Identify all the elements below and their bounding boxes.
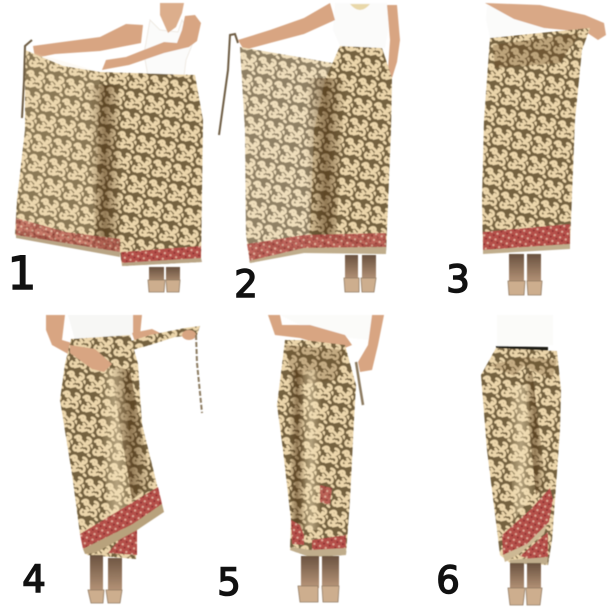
gathered knot folds <box>490 357 557 380</box>
sarong <box>482 28 590 250</box>
shoes <box>148 280 180 292</box>
hem <box>483 244 570 254</box>
red border <box>247 233 386 261</box>
tank top <box>486 5 548 38</box>
step 3: second side pulled across <box>482 3 606 295</box>
hanging tie <box>196 335 202 413</box>
front red border <box>121 246 201 264</box>
model arms <box>268 315 384 372</box>
fold shadow <box>288 370 306 530</box>
shoes <box>508 281 542 295</box>
shoes <box>344 278 376 292</box>
red border panel <box>16 218 120 253</box>
model arms <box>46 315 160 372</box>
legs <box>301 556 339 588</box>
hand holding tie <box>182 330 196 340</box>
tank top <box>333 3 390 48</box>
number 3: 3 <box>446 258 470 301</box>
waist folds <box>493 33 580 68</box>
model arm and hand <box>485 3 606 40</box>
diagonal hem <box>503 524 547 562</box>
red border <box>483 224 570 250</box>
model torso and tank top <box>144 20 194 76</box>
draped sarong <box>60 335 163 559</box>
fold shading <box>306 78 346 238</box>
white top <box>497 315 553 346</box>
step 6: finished sarong with knot <box>481 315 561 605</box>
necklace <box>350 4 370 10</box>
hand on waist <box>70 345 112 372</box>
number 1: 1 <box>8 247 36 300</box>
legs <box>90 555 122 593</box>
waist tie <box>22 40 32 118</box>
shoes <box>298 586 339 602</box>
step 4: front gathered and tie pulled around the waist <box>46 315 202 603</box>
centre fold highlight <box>506 385 536 520</box>
fold shading <box>88 85 122 250</box>
shoes <box>88 590 122 603</box>
red border <box>312 535 346 552</box>
red patch <box>320 485 332 505</box>
fold shadow <box>110 365 152 500</box>
diagonal hem <box>83 504 164 554</box>
sarong <box>277 340 356 557</box>
legs <box>345 255 376 281</box>
sarong cloth <box>15 50 203 266</box>
red corner <box>291 520 304 545</box>
centre fold <box>300 370 322 530</box>
neck and chin <box>160 3 184 33</box>
pale sheen on left panel <box>16 50 100 235</box>
number 6: 6 <box>436 559 460 602</box>
model arms <box>238 3 400 78</box>
red diagonal border <box>80 487 162 549</box>
lower hem <box>510 557 548 564</box>
central fold highlight <box>98 368 136 523</box>
wrapped panel <box>304 46 392 254</box>
black waistband <box>496 346 548 351</box>
fold shadow <box>524 370 546 495</box>
flap highlight <box>240 47 332 263</box>
white top <box>68 315 135 340</box>
legs <box>510 563 541 591</box>
lower red panel <box>520 532 548 559</box>
legs <box>149 267 180 285</box>
lower red panel <box>108 530 137 555</box>
open sarong flap <box>240 47 332 263</box>
number 4: 4 <box>22 558 46 601</box>
tie band held out <box>118 326 200 352</box>
hem <box>16 235 202 266</box>
hem <box>290 547 346 557</box>
number 5: 5 <box>217 561 241 604</box>
number 2: 2 <box>234 263 258 306</box>
right arm <box>102 15 201 70</box>
left arm <box>33 24 143 58</box>
step 5: knot formed and tie tucked <box>268 315 384 602</box>
step 2: one side wrapped across the body <box>219 3 400 292</box>
shoes <box>508 588 542 605</box>
legs <box>509 254 541 284</box>
waist tie <box>219 34 238 135</box>
hem <box>249 247 386 263</box>
step 1: opened sarong held out with both arms <box>15 3 203 292</box>
red diagonal border <box>502 488 553 555</box>
white top <box>280 315 372 340</box>
gathered waist folds <box>285 345 345 385</box>
finished sarong <box>481 348 561 565</box>
tucked tie <box>356 362 363 405</box>
